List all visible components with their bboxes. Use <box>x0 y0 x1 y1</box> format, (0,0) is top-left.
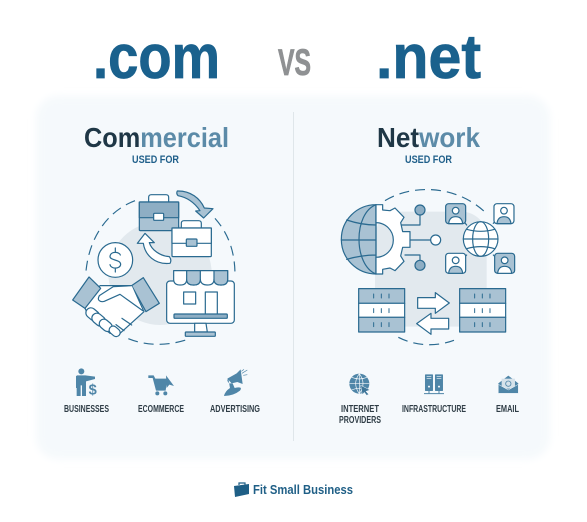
heading: Network: Network <box>377 122 480 153</box>
icon: server towers <box>424 374 444 394</box>
connector lines <box>402 215 430 260</box>
logo text: Fit Small Business <box>253 483 353 497</box>
icon: megaphone in hand <box>224 369 247 396</box>
title: .net: .net <box>376 23 481 92</box>
icon: handshake <box>73 277 159 338</box>
illustration: network <box>341 190 515 345</box>
label line 2: PROVIDERS <box>339 415 381 426</box>
icon: open envelope <box>498 376 518 393</box>
item: email <box>496 376 519 415</box>
icon: blue briefcase <box>139 195 179 231</box>
subheading: used for, commercial: USED FOR <box>132 154 179 166</box>
item: businesses <box>64 368 109 415</box>
label: INTERNET <box>341 404 379 415</box>
icon: businessman: $ <box>89 383 97 399</box>
label: BUSINESSES <box>64 404 109 415</box>
arrow: left <box>417 313 449 334</box>
label: ADVERTISING <box>210 404 260 415</box>
backdrop blob <box>375 212 487 327</box>
label: INFRASTRUCTURE <box>402 404 466 415</box>
icon: globe half <box>341 205 376 274</box>
icon: storefront monitor <box>167 271 234 336</box>
arrow: right <box>418 293 449 313</box>
center divider <box>293 112 294 441</box>
dashed circle <box>86 201 235 344</box>
icon: user tiles <box>446 204 515 273</box>
arrow: bottom curved <box>137 233 171 264</box>
icon: right server <box>460 289 506 332</box>
connector nodes <box>415 205 441 270</box>
item: ecommerce <box>138 375 184 415</box>
item: infrastructure <box>402 374 466 415</box>
backdrop blob <box>108 222 212 325</box>
arrow: top curved <box>177 191 213 218</box>
background panel <box>36 96 550 459</box>
icon: gear <box>376 205 410 274</box>
icon: shopping cart <box>148 375 174 395</box>
item: advertising <box>210 369 260 415</box>
heading: Commercial: Commercial <box>84 122 229 153</box>
icon: globe with cursor <box>349 374 370 395</box>
item: internet providers <box>339 374 381 426</box>
dashed circle <box>385 190 487 345</box>
icon: dollar coin <box>98 243 133 277</box>
icon: left server <box>359 289 405 332</box>
title: vs: VS <box>278 42 311 83</box>
label: ECOMMERCE <box>138 404 184 415</box>
label: EMAIL <box>496 404 519 415</box>
icon: white briefcase <box>172 221 211 257</box>
logo: Fit Small Business <box>234 483 353 497</box>
subheading: used for, network: USED FOR <box>405 154 452 166</box>
icon: logo briefcase <box>234 483 249 497</box>
title: .com: .com <box>93 23 220 92</box>
icon: small globe <box>463 222 498 256</box>
illustration: commercial <box>73 191 235 344</box>
network spokes <box>460 217 500 262</box>
